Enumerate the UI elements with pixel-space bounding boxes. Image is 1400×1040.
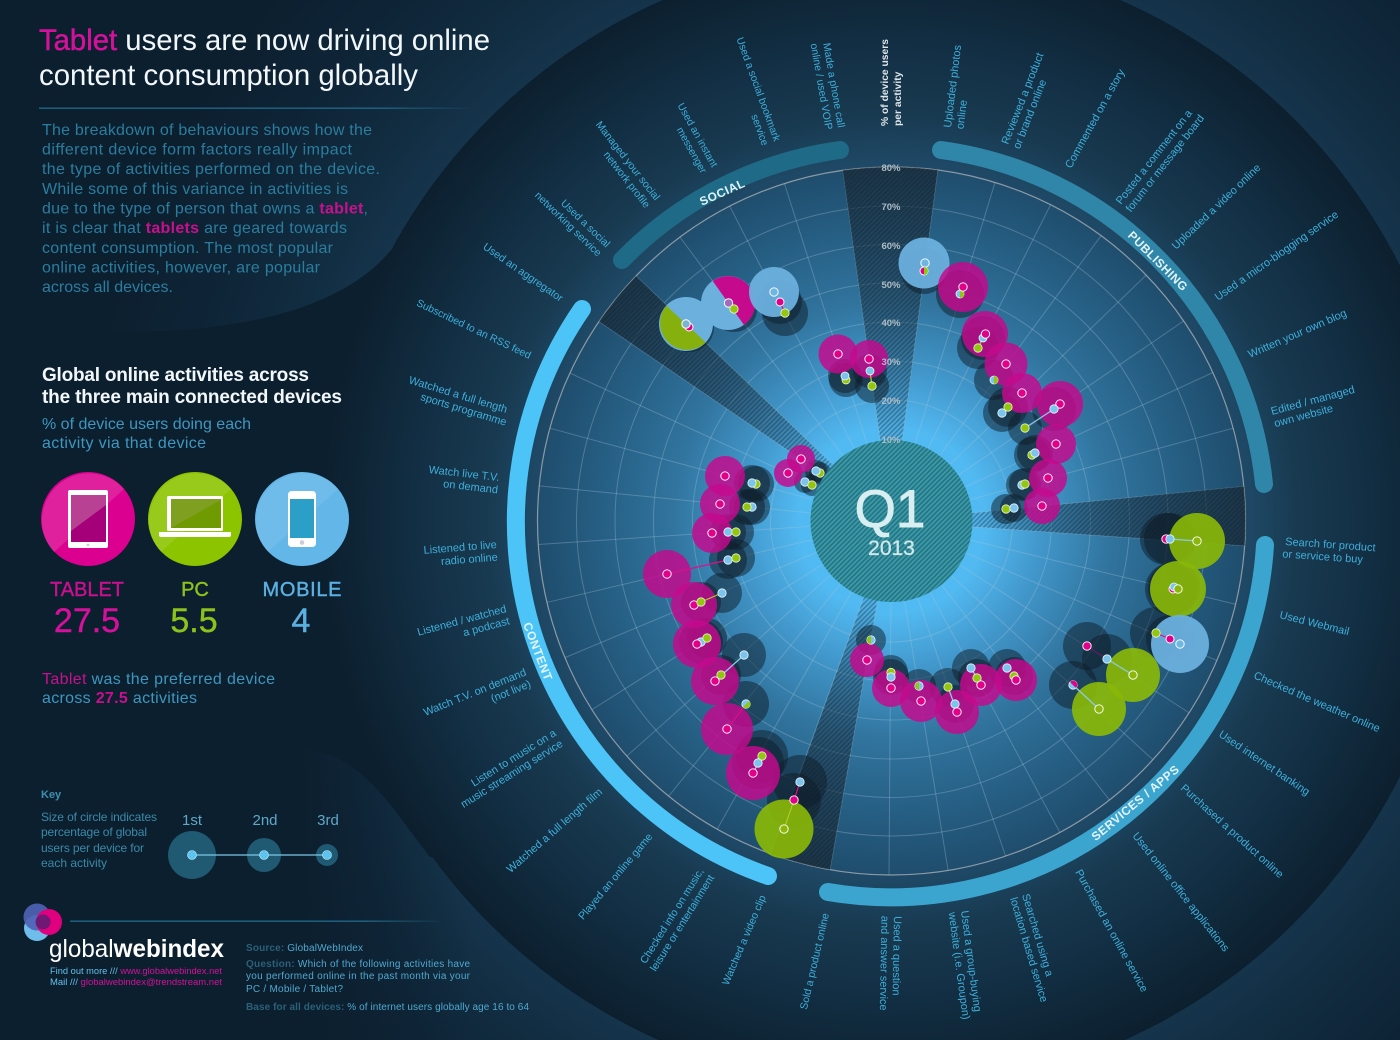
label: Used a group-buying [958,910,983,1013]
label: mobile: MOBILE [262,579,342,601]
bubble: watched video clip [754,778,814,858]
label: Watch live T.V. [428,464,500,484]
logo mark [24,904,62,941]
heading: global online activities: Global online activities across [42,365,309,386]
bubble: checked info [726,746,780,800]
bubble: social bookmark [818,334,858,384]
label: Subscribed to an RSS feed [414,298,533,362]
bubble: online game [701,700,753,755]
title [39,24,490,92]
section label: publishing: PUBLISHING [1125,228,1191,294]
bubble: reviewed product [938,262,988,312]
source notes: Question: Which of the following activities have [246,959,470,970]
intro paragraph: due to the type of person that owns a tablet, [42,200,368,218]
key description: each activity [41,856,107,870]
percentage scale: 60% [881,241,901,252]
bubble: phone call [850,340,888,390]
subheading: % of device users doing each [42,416,251,433]
key description: users per device for [41,841,144,855]
section arc: services and apps [828,545,1265,897]
bubble: aggregator [787,445,824,477]
activity labels [404,36,1382,1020]
intro paragraph: While some of this variance in activities is [42,181,348,198]
intro paragraph: across all devices. [42,279,173,296]
label: service [748,113,770,148]
bubble: commented on story [962,311,1008,357]
intro paragraph [42,122,380,296]
logo wordmark: globalwebindex [49,935,224,963]
section arc: publishing [941,150,1264,484]
preferred device statement: across 27.5 activities [42,690,197,707]
percentage scale: 20% [881,396,901,407]
footer rule [70,920,440,922]
bubble: group buying [900,680,942,722]
label: Search for product [1285,536,1376,554]
label: Used a social bookmark [734,36,782,144]
label: and answer service [877,916,891,1011]
label: online [954,99,970,130]
value: PC: 5.5 [170,602,218,640]
bubble: written blog [1028,424,1076,464]
label: online / used VOIP [808,42,835,131]
title: content consumption globally [39,59,418,92]
label: or service to buy [1282,548,1364,566]
label: Uploaded photos [942,44,964,128]
preferred device statement: Tablet was the preferred device [42,671,275,688]
hatched gaps between sections [599,167,1245,870]
label: Checked the weather online [1252,670,1382,735]
bubble: posted comment [984,342,1028,386]
bubble: last publishing activity [1002,488,1060,524]
label: Commented on a story [1063,67,1128,170]
subheading: activity via that device [42,435,206,452]
label: radio online [441,551,498,568]
percentage scale: 80% [881,163,901,174]
key graphic: 3rd [317,812,339,829]
label: Searched using a [1019,892,1055,979]
key graphic: 2nd [252,812,278,829]
label: Used a question [890,916,903,996]
bubble: music streaming [673,620,721,668]
label: Listened / watched [416,603,508,639]
label: messenger [674,126,708,176]
key description: Size of circle indicates [41,810,157,824]
label: networking service [532,190,604,259]
intro paragraph: The breakdown of behaviours shows how the [42,122,372,139]
label: leisure or entertainment [648,873,717,974]
section arc: social [622,150,840,260]
bubble: used webmail [1150,561,1206,617]
bubble: social networking service [659,297,713,351]
label: Played an online game [576,831,655,922]
shadow circles: second and third ranked devices [664,248,1200,827]
device: PC [148,472,242,640]
bubble: edited website [1018,459,1067,497]
label: network profile [601,149,652,211]
label: PC: PC [181,579,209,601]
title rule [39,108,469,109]
intro paragraph: it is clear that tablets are geared towards [42,220,347,237]
label: location based service [1007,896,1050,1004]
bubble: full length film [691,651,748,705]
key description: percentage of global [41,825,147,839]
heading: global online activities [42,365,342,408]
bubble: instant messenger [749,267,799,317]
label: Posted a comment on a [1114,107,1195,207]
label: Made a phone call [820,42,847,129]
axis label: percent of device users: per activity [893,71,904,126]
label: Reviewed a product [1000,51,1046,146]
contact details: Mail /// globalwebindex@trendstream.net [50,977,223,987]
label: on demand [443,478,499,496]
key heading: Key [41,789,62,801]
section label: services and apps: SERVICES / APPS [1089,762,1182,844]
label: own website [1273,403,1334,430]
percentage scale: 30% [881,357,901,368]
label: (not live) [489,678,533,705]
label: website (i.e. Groupon) [946,910,972,1020]
source notes: PC / Mobile / Tablet? [246,984,343,995]
section label: content: CONTENT [520,620,555,683]
intro paragraph: different device form factors really impact [42,142,353,158]
bubble: sports programme [705,456,760,496]
bubble: search for product [1162,513,1225,569]
label: Used a social [558,197,612,250]
source notes: you performed online in the past month via your [246,971,471,982]
contact details: Find out more /// www.globalwebindex.net [50,966,223,976]
value: tablet: 27.5 [54,602,120,640]
bubble: location based service [935,683,979,734]
source notes [246,943,529,1013]
label: Sold a product online [798,912,832,1011]
label: sports programme [419,391,508,429]
label: Used an instant [675,102,719,170]
percentage scale: 50% [881,280,901,291]
label: Used internet banking [1216,729,1312,798]
bubble: live TV [700,484,756,524]
label: Purchased an online service [1072,868,1150,994]
label: Written your own blog [1246,307,1349,361]
label: tablet: TABLET [50,579,124,601]
heading: global online activities: the three main connected devices [42,387,342,408]
preferred device statement [42,671,275,707]
grid rings [538,167,1246,875]
bubble: TV on demand [671,582,726,628]
label: music streaming service [459,738,565,811]
grid spokes [538,170,1245,875]
title: Tablet users are now driving online [39,24,490,57]
bubble: purchased product [1069,681,1126,736]
label: Edited / managed [1270,384,1356,418]
centre disc: Q1 2013 [810,440,972,602]
label: a podcast [462,615,511,639]
key graphic [168,812,339,879]
section arc: content [516,309,768,876]
label: Uploaded a video online [1170,162,1263,252]
intro paragraph: online activities, however, are popular [42,260,321,276]
centre disc: Q1 2013: Q1 [855,480,925,539]
percentage scale [881,163,901,446]
label: Purchased a product online [1178,782,1286,881]
bubble: uploaded video [998,373,1042,417]
bubble: micro-blogging [1021,381,1083,432]
bubble: checked weather [1151,615,1209,673]
radar disc [538,167,1246,875]
bubble: podcast [643,550,740,598]
bubble: uploaded photos [898,238,950,288]
label: or brand online [1011,78,1049,151]
label: Used Webmail [1278,609,1350,638]
bubble: internet banking [1083,642,1160,702]
bubble: sold product [850,636,884,677]
axis label: percent of device users: % of device users [880,39,891,126]
percentage scale: 40% [881,318,901,329]
percentage scale: 10% [881,435,901,446]
label: Watched a full length film [505,786,605,876]
label: Listened to live [423,539,497,557]
label: Listen to music on a [469,727,559,789]
source notes: Source: GlobalWebIndex [246,943,363,954]
label: forum or message board [1124,113,1207,215]
key graphic: 1st [182,812,203,829]
label: Watched a video clip [720,893,769,987]
label: Watched a full length [407,374,509,416]
label: Used a micro-blogging service [1213,209,1341,303]
label: Managed your social [593,119,662,203]
percentage scale: 70% [881,202,901,213]
label: Watch T.V. on demand [422,667,528,719]
bubble: office applications [995,659,1037,701]
bubble: live radio [692,513,740,553]
subheading [42,416,251,452]
bubble: RSS feed [774,459,816,489]
label: Checked info on music, [638,866,707,966]
intro paragraph: the type of activities performed on the device. [42,161,380,178]
bubble: question and answer [872,668,910,707]
label: Used an aggregator [481,241,565,305]
key description [41,810,157,870]
section label: social: SOCIAL [697,176,747,209]
bubble: social network profile [701,276,755,330]
value: mobile: 4 [292,602,310,640]
source notes: Base for all devices: % of internet users globally age 16 to 64 [246,1002,529,1013]
centre disc: Q1 2013: 2013 [868,537,915,560]
contact details [50,966,223,987]
bubble: online service [960,664,1002,706]
intro paragraph: content consumption. The most popular [42,240,334,257]
device: tablet [41,472,135,640]
label: Used online office applications [1130,830,1232,955]
device: mobile [255,472,349,640]
